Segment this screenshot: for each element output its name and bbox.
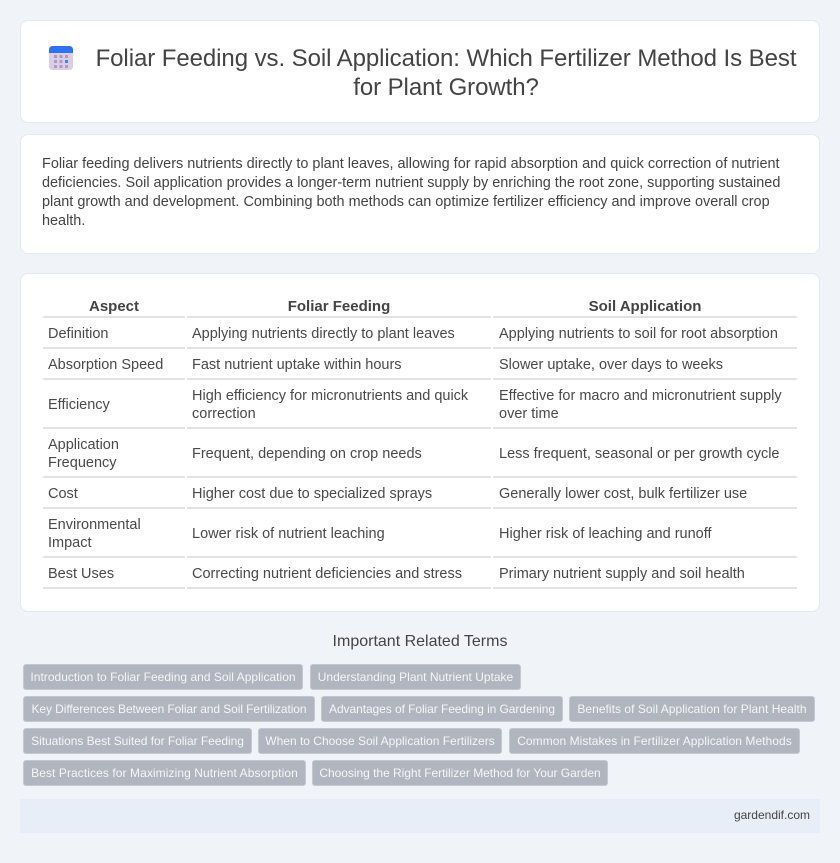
row: application frequency: Application [48, 437, 119, 453]
text block: introduction: Foliar feeding delivers nutrients directly to plant leaves, allowing for rapid absorption and quick correction of nutrient [42, 156, 780, 172]
table: comparison of foliar feeding and soil application [43, 298, 797, 589]
row: cost: Generally lower cost, bulk fertilizer use [499, 486, 747, 502]
row: definition: Applying nutrients to soil for root absorption [499, 326, 778, 342]
tag [321, 696, 563, 722]
tag [258, 728, 502, 754]
text block: introduction: plant growth and development. Combining both methods can optimize fertilizer efficiency and improve overall crop [42, 194, 770, 210]
row: efficiency: correction [192, 406, 256, 422]
tag: Situations Best Suited for Foliar Feeding [31, 734, 244, 748]
row: environmental impact: Higher risk of leaching and runoff [499, 526, 712, 542]
row: efficiency [48, 388, 782, 422]
footer text: site name: gardendif.com [734, 808, 810, 822]
panel: comparison table [20, 273, 820, 612]
tag [569, 696, 815, 722]
row: absorption speed: Fast nutrient uptake within hours [192, 357, 402, 373]
tag [23, 760, 306, 786]
tag: Understanding Plant Nutrient Uptake [318, 670, 513, 684]
title: Foliar Feeding vs. Soil Application: Which Fertilizer Method Is Best [96, 45, 796, 72]
row: efficiency: over time [499, 406, 559, 422]
row: definition [48, 326, 778, 342]
row: application frequency [48, 437, 779, 471]
tag: Best Practices for Maximizing Nutrient Absorption [31, 766, 298, 780]
icon: calendar [49, 46, 73, 70]
row: absorption speed: Slower uptake, over days to weeks [499, 357, 723, 373]
row: cost: Higher cost due to specialized sprays [192, 486, 432, 502]
row: efficiency: Efficiency [48, 397, 110, 413]
text block: introduction: health. [42, 213, 85, 229]
column heading: soil application: Soil Application [589, 298, 701, 315]
row: environmental impact: Impact [48, 535, 92, 551]
tag: When to Choose Soil Application Fertilizers [265, 734, 495, 748]
row: cost [48, 486, 747, 502]
row: definition: Applying nutrients directly to plant leaves [192, 326, 455, 342]
panel: introduction [20, 134, 820, 254]
tag [312, 760, 608, 786]
footer bar [20, 799, 820, 833]
tag list: related terms [23, 664, 815, 786]
row: definition: Definition [48, 326, 108, 342]
tag [23, 664, 303, 690]
row: application frequency: Less frequent, seasonal or per growth cycle [499, 446, 779, 462]
heading: important related terms: Important Related Terms [333, 633, 507, 650]
tag: Choosing the Right Fertilizer Method for Your Garden [319, 766, 601, 780]
tag: Introduction to Foliar Feeding and Soil Application [30, 670, 296, 684]
column heading: aspect: Aspect [89, 298, 139, 315]
tag [23, 728, 252, 754]
tag: Advantages of Foliar Feeding in Gardening [329, 702, 555, 716]
row: application frequency: Frequent, depending on crop needs [192, 446, 422, 462]
title: for Plant Growth? [353, 74, 539, 101]
row: efficiency: High efficiency for micronutrients and quick [192, 388, 468, 404]
row: best uses: Best Uses [48, 566, 114, 582]
tag [509, 728, 800, 754]
row: best uses [48, 566, 745, 582]
row: absorption speed: Absorption Speed [48, 357, 163, 373]
text block: introduction [42, 156, 780, 229]
text block: introduction: deficiencies. Soil application provides a longer-term nutrient supply by enriching the root zone, supporting sustained [42, 175, 780, 191]
row: cost: Cost [48, 486, 78, 502]
row: environmental impact: Environmental [48, 517, 141, 533]
tag [23, 696, 315, 722]
panel: title header [20, 20, 820, 123]
row: efficiency: Effective for macro and micronutrient supply [499, 388, 782, 404]
row: application frequency: Frequency [48, 455, 117, 471]
tag: Key Differences Between Foliar and Soil Fertilization [31, 702, 306, 716]
row: best uses: Correcting nutrient deficiencies and stress [192, 566, 462, 582]
tag: Common Mistakes in Fertilizer Application Methods [517, 734, 792, 748]
tag [310, 664, 521, 690]
row: environmental impact: Lower risk of nutrient leaching [192, 526, 385, 542]
column heading: foliar feeding: Foliar Feeding [288, 298, 390, 315]
tag: Benefits of Soil Application for Plant Health [577, 702, 807, 716]
row: environmental impact [48, 517, 712, 551]
title [96, 45, 796, 101]
row: absorption speed [48, 357, 723, 373]
row: best uses: Primary nutrient supply and soil health [499, 566, 745, 582]
